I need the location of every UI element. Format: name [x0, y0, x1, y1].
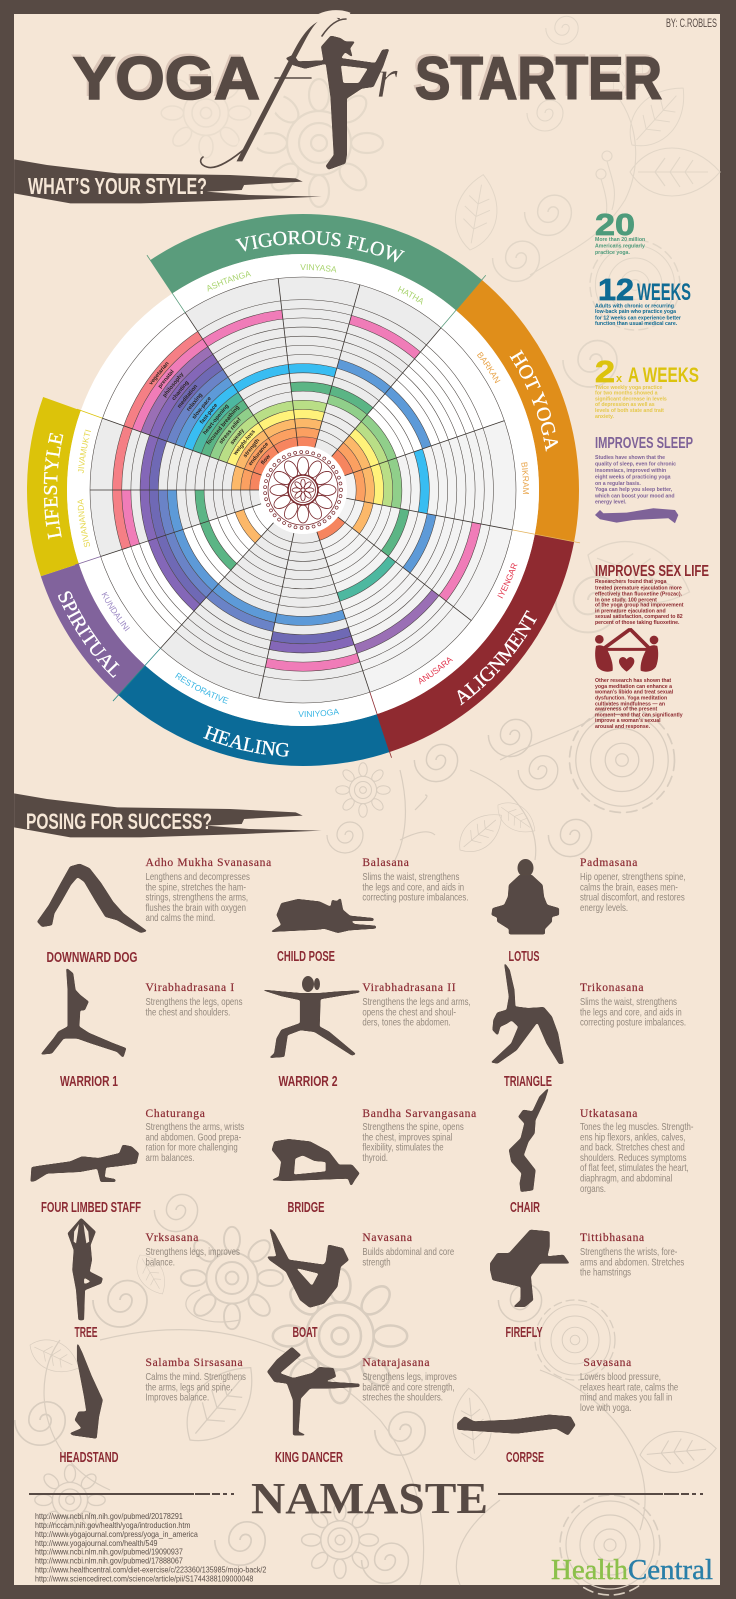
- style labels: ANUSARA: [419, 657, 453, 684]
- description: arms and abdomen. Stretches: [580, 1256, 685, 1268]
- ring legend labels: philosophy: [162, 371, 186, 399]
- stat text: quality of sleep, even for chronic: [595, 462, 676, 468]
- description: Strengthens the wrists, fore-: [580, 1246, 677, 1257]
- source links: http://www.ncbi.nlm.nih.gov/pubmed/20178291: [35, 1511, 183, 1521]
- description: calms the brain, eases men-: [580, 881, 678, 893]
- ring legend labels: flow: [260, 453, 272, 466]
- title shadow: STARTER: [412, 42, 660, 109]
- ring grid lines: [90, 277, 516, 703]
- style labels: HATHA: [398, 286, 423, 305]
- sanskrit name: Salamba Sirsasana: [146, 1357, 243, 1369]
- pose name: TREE: [74, 1325, 98, 1341]
- pose: four limbed staff: [31, 1108, 245, 1216]
- center mandala: [259, 446, 347, 534]
- description: thyroid.: [362, 1152, 388, 1163]
- description: the arms, legs and spine.: [146, 1381, 233, 1393]
- description: diaphragm, and abdominal: [580, 1173, 672, 1184]
- sanskrit name: Chaturanga: [146, 1108, 206, 1120]
- sanskrit name: Virabhadrasana I: [146, 982, 235, 994]
- stat text second: awareness of the present: [595, 707, 658, 713]
- description: Strengthens the spine, opens: [362, 1121, 464, 1132]
- style labels: BARKAN: [477, 352, 500, 384]
- description: Tones the leg muscles. Strength-: [580, 1121, 693, 1132]
- style labels: BIKRAM: [521, 462, 529, 494]
- description: flexibility, stimulates the: [362, 1142, 444, 1153]
- category labels: HOT YOGA: [510, 350, 558, 452]
- wheel white disc: [67, 254, 539, 726]
- description: shoulders. Reduces symptoms: [580, 1152, 687, 1163]
- description: Strengthens legs, improves: [146, 1246, 240, 1257]
- stat text: significant decrease in levels: [595, 396, 667, 402]
- description: Calms the mind. Strengthens: [146, 1371, 246, 1382]
- description: Builds abdominal and core: [362, 1246, 454, 1257]
- source links: http://www.healthcentral.com/diet-exercise/c/223360/135985/mojo-back/2: [35, 1565, 266, 1575]
- pose: lotus: [492, 857, 686, 965]
- namaste heading: NAMASTE: [251, 1474, 488, 1523]
- description: mind and makes you fall in: [580, 1392, 672, 1403]
- stat text: More than 20 million: [595, 237, 645, 243]
- pose name: FOUR LIMBED STAFF: [41, 1200, 141, 1216]
- stat text: eight weeks of practicing yoga: [595, 474, 671, 480]
- style wheel: [27, 214, 580, 766]
- pose: chair: [509, 1088, 693, 1216]
- arcs: viniyoga: [80, 267, 526, 713]
- heading brush: posing for success: [14, 793, 322, 837]
- category labels: HEALING: [203, 725, 290, 757]
- description: correcting posture imbalances.: [362, 892, 468, 903]
- description: streches the shoulders.: [362, 1392, 443, 1403]
- ring legend labels: [148, 360, 272, 467]
- source links: http://nccam.nih.gov/health/yoga/introduction.htm: [35, 1520, 190, 1530]
- heading brush: what's your style: [14, 159, 322, 203]
- stat text: for 12 weeks can experience better: [595, 315, 681, 321]
- description: love with yoga.: [580, 1402, 632, 1413]
- source links: http://www.yogajournal.com/press/yoga_in_america: [35, 1529, 198, 1539]
- ring legend labels: relaxing: [186, 392, 204, 413]
- weeks word: WEEKS: [637, 279, 691, 306]
- arcs: bikram: [148, 335, 458, 645]
- description: the chest and shoulders.: [146, 1006, 230, 1018]
- pose name: BRIDGE: [288, 1200, 325, 1216]
- pose: child pose: [271, 857, 468, 965]
- description: strings, strengthens the arms,: [146, 892, 248, 903]
- stat text: low-back pain who practice yoga: [595, 309, 676, 315]
- description: ration for more challenging: [146, 1142, 238, 1153]
- title: [70, 0, 662, 169]
- stat text second: improve a woman’s sexual: [595, 718, 661, 724]
- pose: warrior 1: [41, 968, 243, 1090]
- style labels: RESTORATIVE: [175, 672, 229, 704]
- stat text: Americans regularly: [595, 244, 645, 250]
- ring legend labels: sweaty: [229, 427, 246, 446]
- left rule: [29, 1493, 235, 1495]
- ring legend labels: focused breathing: [206, 404, 241, 446]
- sanskrit name: Trikonasana: [580, 982, 644, 994]
- pose: firefly: [491, 1230, 685, 1341]
- category labels: SPIRITUAL: [58, 591, 120, 678]
- sanskrit name: Adho Mukha Svanasana: [146, 857, 272, 869]
- stat text: levels of both state and trait: [595, 408, 664, 414]
- source links: http://www.ncbi.nlm.nih.gov/pubmed/17888067: [35, 1556, 183, 1566]
- pose: triangle: [491, 963, 686, 1090]
- stat text: In one study, 100 percent: [595, 597, 657, 603]
- pose: corpse: [458, 1357, 678, 1466]
- description: strual discomfort, and restores: [580, 892, 685, 903]
- stat text: of depression as well as: [595, 402, 655, 408]
- pose: warrior 2: [263, 976, 471, 1090]
- description: Strengthens the arms, wrists: [146, 1121, 245, 1132]
- description: Strengthens the legs and arms,: [362, 996, 471, 1007]
- pose name: WARRIOR 2: [278, 1074, 338, 1090]
- style labels: JIVAMUKTI: [78, 430, 91, 474]
- ring legend labels: chanting: [171, 380, 191, 402]
- stat text: sexual satisfaction, compared to 82: [595, 614, 683, 620]
- heading text: WHAT’S YOUR STYLE?: [28, 173, 207, 199]
- pose: headstand: [60, 1343, 246, 1466]
- source links: http://www.ncbi.nlm.nih.gov/pubmed/19090937: [35, 1547, 183, 1557]
- arcs: iyengar: [96, 283, 510, 697]
- icon: couple yoga: [595, 630, 658, 672]
- description: and calms the mind.: [146, 912, 215, 923]
- dancer silhouette: [286, 36, 389, 169]
- ring legend labels: endurance: [248, 441, 270, 467]
- style labels: IYENGAR: [497, 563, 518, 598]
- ring legend labels: vegetarian: [148, 360, 171, 386]
- right rule: [498, 1493, 706, 1495]
- style labels: [78, 264, 529, 717]
- arcs: kundalini: [79, 266, 527, 714]
- stat text: anxiety.: [595, 414, 614, 420]
- stat: 12 weeks: [595, 272, 691, 327]
- ring legend labels: meditation: [177, 383, 199, 410]
- stat text second: moment—and that can significantly: [595, 712, 683, 718]
- sanskrit name: Navasana: [362, 1232, 413, 1244]
- category labels: VIGOROUS FLOW: [235, 230, 405, 262]
- title word starter: STARTER: [415, 45, 662, 112]
- arcs: restorative: [137, 324, 469, 656]
- description: Hip opener, strengthens spine,: [580, 871, 686, 882]
- ring legend labels: prenatal: [157, 369, 176, 390]
- stat text second: dysfunction. Yoga meditation: [595, 695, 667, 701]
- stat text: for two months showed a: [595, 391, 658, 397]
- title shadow: [70, 42, 660, 109]
- stat text: effectively than fluoxetine (Prozac).: [595, 591, 683, 597]
- description: the chest, improves spinal: [362, 1131, 452, 1143]
- description: balance.: [146, 1256, 175, 1268]
- stat text: Yoga can help you sleep better,: [595, 487, 673, 493]
- description: balance and core strength,: [362, 1381, 455, 1393]
- description: relaxes heart rate, calms the: [580, 1381, 678, 1393]
- wheel outer segments: [0, 128, 665, 852]
- ring legend labels: stress relief: [218, 417, 243, 445]
- title word yoga: YOGA: [73, 45, 260, 112]
- pose: king dancer: [268, 1347, 457, 1466]
- stat text second: Other research has shown that: [595, 678, 671, 684]
- description: organs.: [580, 1183, 606, 1194]
- pose: downward dog: [38, 857, 272, 966]
- stat: 20 million: [595, 207, 645, 256]
- stat text: Researchers found that yoga: [595, 579, 667, 585]
- sanskrit name: Bandha Sarvangasana: [362, 1108, 477, 1120]
- stat text: percent of those taking fluoxetine.: [595, 620, 680, 626]
- stat: 2x a weeks: 2: [595, 354, 615, 389]
- ring legend labels: strength: [242, 437, 262, 459]
- arcs: vinyasa: [168, 355, 438, 625]
- stat: 12 weeks: 12: [598, 272, 634, 307]
- description: and back. Stretches chest and: [580, 1142, 685, 1153]
- ring legend labels: fast-pace: [199, 403, 219, 425]
- arcs: hatha: [86, 273, 520, 707]
- description: Slims the waist, strengthens: [362, 871, 460, 882]
- ring legend labels: weight-loss: [232, 429, 257, 457]
- sanskrit name: Virabhadrasana II: [362, 982, 456, 994]
- multiplier: x: [616, 373, 623, 385]
- sanskrit name: Balasana: [362, 857, 410, 869]
- title letter r: r: [376, 48, 398, 110]
- style labels: SIVANANDA: [78, 498, 90, 548]
- pose name: BOAT: [292, 1325, 318, 1341]
- stat text: practice yoga.: [595, 250, 630, 256]
- arcs: anusara: [68, 255, 538, 725]
- arcs: barkan: [118, 305, 488, 675]
- arcs: sivananda: [68, 255, 538, 725]
- stat text: Adults with chronic or recurring: [595, 304, 674, 310]
- stat: 20 million: 20: [595, 207, 635, 242]
- healthcentral logo: HealthCentral: [551, 1554, 713, 1586]
- description: correcting posture imbalances.: [580, 1017, 686, 1028]
- arm gap right: [84, 1224, 89, 1243]
- category labels: [44, 230, 558, 757]
- pose name: LOTUS: [508, 949, 540, 965]
- style labels: ASHTANGA: [208, 271, 252, 292]
- description: the hamstrings: [580, 1267, 632, 1278]
- stat text: on a regular basis.: [595, 481, 641, 487]
- sanskrit name: Tittibhasana: [580, 1232, 645, 1244]
- pose name: FIREFLY: [506, 1325, 543, 1341]
- description: Slims the waist, strengthens: [580, 996, 677, 1007]
- stat text second: woman’s libido and treat sexual: [594, 690, 674, 696]
- stat text: insomniacs, improved within: [595, 468, 666, 474]
- description: Strengthens legs, improves: [362, 1371, 457, 1382]
- sanskrit name: Vrksasana: [146, 1232, 199, 1244]
- style labels: KUNDALINI: [102, 592, 130, 632]
- arcs: jivamukti: [117, 304, 489, 676]
- description: arm balances.: [146, 1152, 194, 1163]
- description: the legs and core, and aids in: [580, 1006, 682, 1018]
- stat text: of the yoga group had improvement: [595, 603, 684, 609]
- style labels: VINIYOGA: [298, 708, 340, 717]
- stat text: Studies have shown that the: [595, 455, 665, 461]
- stat text: function than usual medical care.: [595, 321, 678, 327]
- pose: boat: [268, 1228, 454, 1341]
- description: the spine, stretches the ham-: [146, 881, 246, 893]
- description: Strengthens the legs, opens: [146, 996, 243, 1007]
- stat text: energy level.: [595, 500, 627, 506]
- pose name: CHAIR: [510, 1200, 540, 1216]
- category labels: LIFESTYLE: [44, 432, 64, 540]
- stat text second: arousal and response.: [595, 724, 651, 730]
- stat text: in premature ejaculation and: [595, 609, 666, 615]
- sector tint wedges: [123, 310, 483, 670]
- stat: improves sleep: [594, 435, 693, 523]
- hair: [314, 978, 320, 990]
- heading text: POSING FOR SUCCESS?: [26, 809, 212, 834]
- pose name: HEADSTAND: [60, 1450, 118, 1466]
- description: Lowers blood pressure,: [580, 1371, 661, 1382]
- sanskrit name: Savasana: [584, 1357, 632, 1369]
- icon: sleeping figure: [595, 508, 678, 523]
- stat: improves sex life: [594, 563, 709, 730]
- ring legend labels: heart-opening: [202, 403, 231, 436]
- pose: bridge: [272, 1108, 477, 1216]
- pose name: WARRIOR 1: [60, 1074, 118, 1090]
- sanskrit name: Natarajasana: [362, 1357, 430, 1369]
- arm gap left: [74, 1224, 79, 1243]
- pose name: CHILD POSE: [277, 949, 335, 965]
- ring legend labels: slow-pace: [191, 396, 213, 421]
- source links: http://www.yogajournal.com/health/549: [35, 1538, 157, 1548]
- source links: http://www.sciencedirect.com/science/article/pii/S1744388109000048: [35, 1574, 253, 1584]
- description: flushes the brain with oxygen: [146, 902, 246, 913]
- category labels: ALIGNMENT: [458, 610, 537, 706]
- stat text: treated premature ejaculation more: [595, 586, 682, 592]
- description: and abdomen. Good prepa-: [146, 1131, 241, 1143]
- radial sector lines: [75, 255, 580, 758]
- description: opens the chest and shoul-: [362, 1006, 456, 1018]
- stat text: Twice weekly yoga practice: [595, 385, 662, 391]
- pose name: DOWNWARD DOG: [46, 950, 138, 966]
- sanskrit name: Padmasana: [580, 857, 638, 869]
- description: energy levels.: [580, 902, 628, 913]
- style labels: VINYASA: [300, 264, 336, 272]
- stat text second: yoga meditation can enhance a: [595, 684, 672, 690]
- title shadow: YOGA: [70, 42, 258, 109]
- description: of flat feet, stimulates the heart,: [580, 1162, 689, 1173]
- rainbow arcs: legend sector: [65, 252, 541, 728]
- stat: improves sleep: IMPROVES SLEEP: [595, 435, 693, 452]
- pose name: CORPSE: [506, 1450, 544, 1466]
- a weeks word: A WEEKS: [628, 364, 699, 387]
- description: Lengthens and decompresses: [146, 871, 250, 882]
- description: ens hip flexors, ankles, calves,: [580, 1131, 686, 1143]
- stat text: which can boost your mood and: [594, 494, 675, 500]
- pose: tree: [68, 1218, 240, 1341]
- f swash flourish: [201, 19, 346, 168]
- description: ders, tones the abdomen.: [362, 1017, 451, 1028]
- sanskrit name: Utkatasana: [580, 1108, 638, 1120]
- description: Improves balance.: [146, 1392, 209, 1403]
- stat text second: cultivates mindfulness — an: [595, 701, 665, 707]
- arcs: ashtanga: [58, 245, 548, 735]
- description: the legs and core, and aids in: [362, 881, 464, 893]
- pose name: TRIANGLE: [504, 1074, 552, 1090]
- stat: 2x a weeks: [595, 354, 699, 420]
- pose name: KING DANCER: [275, 1450, 343, 1466]
- description: strength: [362, 1256, 391, 1268]
